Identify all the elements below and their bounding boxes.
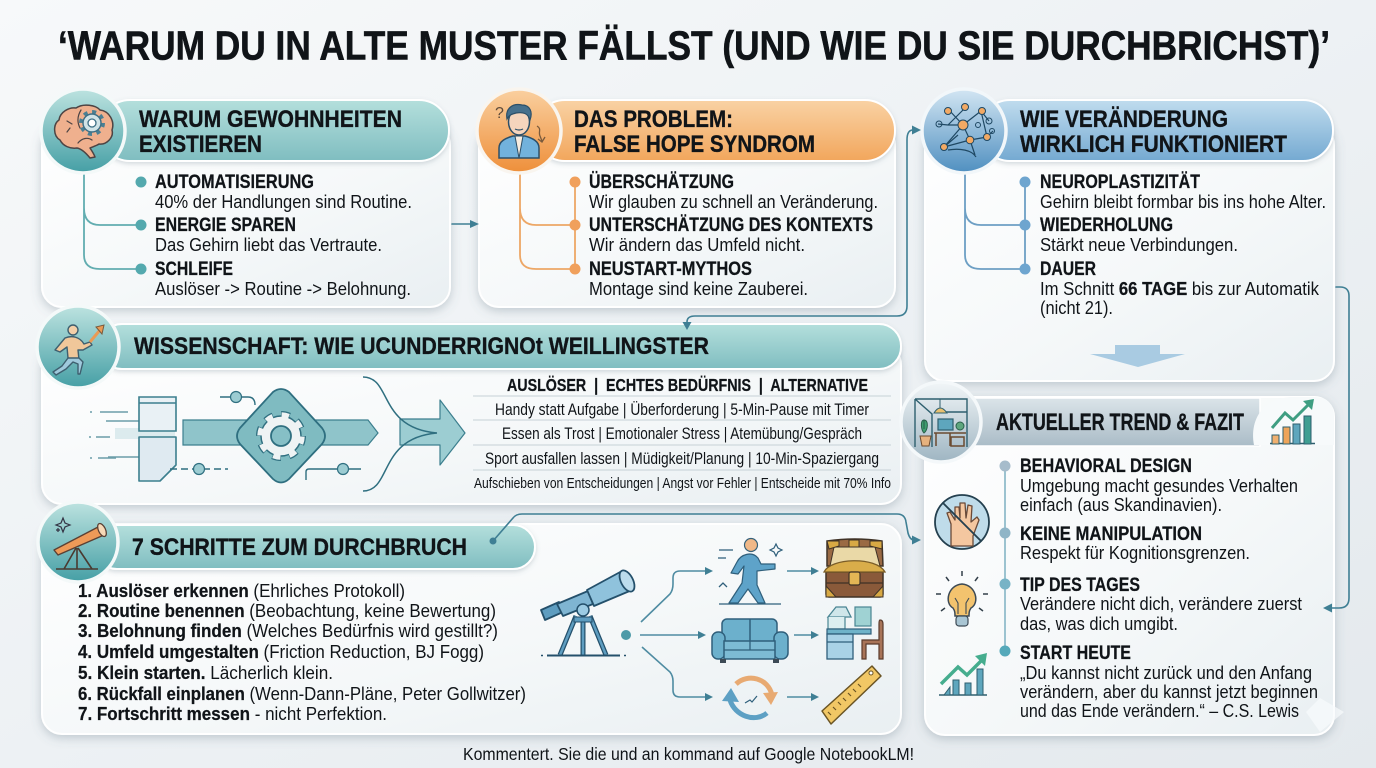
panel header xyxy=(980,100,1333,161)
bullet list xyxy=(1020,456,1318,721)
bullet dots xyxy=(136,176,146,274)
panel card xyxy=(925,125,1334,381)
icon: blue telescope xyxy=(541,568,638,656)
bullet list: und das Ende verändern.“ – C.S. Lewis xyxy=(1020,700,1299,721)
panel header: WISSENSCHAFT: WIE UCUNDERRIGNOt WEILLINGSTER xyxy=(134,333,709,360)
icon: light bulb xyxy=(936,571,988,626)
panel header: DAS PROBLEM: xyxy=(574,106,733,133)
panel card xyxy=(42,524,901,734)
panel card xyxy=(479,125,895,307)
bullet list: 40% der Handlungen sind Routine. xyxy=(155,191,412,212)
panel: aktueller trend und fazit xyxy=(901,382,1344,735)
bullet list xyxy=(155,172,412,299)
numbered steps: 4. Umfeld umgestalten (Friction Reduction, BJ Fogg) xyxy=(78,641,484,662)
bullet list xyxy=(1040,172,1326,318)
bullet list: verändern, aber du kannst jetzt beginnen xyxy=(1020,681,1318,702)
numbered steps: 2. Routine benennen (Beobachtung, keine Bewertung) xyxy=(78,600,496,621)
flow arrows xyxy=(621,567,819,701)
bullet dots xyxy=(570,176,580,274)
bullet list: Das Gehirn liebt das Vertraute. xyxy=(155,234,382,255)
panel header: EXISTIEREN xyxy=(139,131,262,158)
numbered steps xyxy=(78,580,526,724)
bullet list: SCHLEIFE xyxy=(155,259,233,280)
icon: brain with gear xyxy=(41,89,125,173)
arrow: steps to trend xyxy=(490,514,921,544)
bullet list: START HEUTE xyxy=(1020,643,1131,664)
bullet list: Respekt für Kognitionsgrenzen. xyxy=(1020,542,1250,563)
panel header: AKTUELLER TREND & FAZIT xyxy=(996,409,1244,436)
icon: growth chart xyxy=(939,653,987,695)
icon: ruler xyxy=(822,666,881,724)
icon: neural network brain xyxy=(922,89,1006,173)
panel header: WARUM GEWOHNHEITEN xyxy=(139,106,402,133)
panel card xyxy=(42,125,450,307)
panel header xyxy=(100,324,901,369)
table: Essen als Trost | Emotionaler Stress | Atemübung/Gespräch xyxy=(502,424,862,443)
bullet list: Montage sind keine Zauberei. xyxy=(589,278,808,299)
panel header xyxy=(535,100,895,161)
arrow: down to trend xyxy=(1090,345,1185,367)
icon: stop hand xyxy=(935,495,989,549)
icon: confused person xyxy=(477,89,561,173)
bullet list: (nicht 21). xyxy=(1040,297,1113,318)
output arrow xyxy=(400,400,465,465)
bullet list: NEUSTART-MYTHOS xyxy=(589,259,752,280)
icon: sofa xyxy=(712,619,788,663)
numbered steps: 3. Belohnung finden (Welches Bedürfnis wird gestillt?) xyxy=(78,620,498,641)
connector tree xyxy=(965,172,1025,269)
table: AUSLÖSER | ECHTES BEDÜRFNIS | ALTERNATIVE xyxy=(507,375,868,395)
bullet list: das, was dich umgibt. xyxy=(1020,613,1178,634)
panel: warum gewohnheiten existieren xyxy=(41,89,450,307)
panel header: FALSE HOPE SYNDROM xyxy=(574,131,815,158)
connector tree xyxy=(84,172,141,269)
icon: desk and chair xyxy=(827,607,883,659)
icon: orange telescope xyxy=(38,502,118,582)
arrow: change to trend xyxy=(1323,287,1349,612)
panel: 7 schritte xyxy=(38,502,901,734)
bullet list: Stärkt neue Verbindungen. xyxy=(1040,234,1238,255)
table: Sport ausfallen lassen | Müdigkeit/Planung | 10-Min-Spaziergang xyxy=(485,449,879,468)
footer note: Kommentert. Sie die und an kommand auf Google NotebookLM! xyxy=(463,744,914,764)
bullet list xyxy=(589,172,878,299)
bullet list: DAUER xyxy=(1040,259,1096,280)
timeline xyxy=(1000,460,1010,656)
icon: treasure chest xyxy=(824,539,885,597)
panel header: WIRKLICH FUNKTIONIERT xyxy=(1020,131,1287,158)
panel header xyxy=(950,398,1260,446)
numbered steps: 1. Auslöser erkennen (Ehrliches Protokoll) xyxy=(78,580,405,601)
panel card xyxy=(42,345,901,504)
central gear xyxy=(237,389,325,482)
bullet list: Gehirn bleibt formbar bis ins hohe Alter. xyxy=(1040,191,1326,212)
numbered steps: 6. Rückfall einplanen (Wenn-Dann-Pläne, Peter Gollwitzer) xyxy=(78,683,526,704)
icon: desk room xyxy=(901,382,981,462)
table: Aufschieben von Entscheidungen | Angst vor Fehler | Entscheide mit 70% Info xyxy=(474,475,891,492)
arrow: problem to change and science xyxy=(682,126,921,330)
sparkle xyxy=(1306,698,1344,732)
table xyxy=(473,375,891,492)
bullet list: Umgebung macht gesundes Verhalten xyxy=(1020,475,1298,496)
bullet list: ÜBERSCHÄTZUNG xyxy=(589,172,734,193)
bullet list: AUTOMATISIERUNG xyxy=(155,172,314,193)
bullet list: NEUROPLASTIZITÄT xyxy=(1040,172,1200,193)
bullet list: UNTERSCHÄTZUNG DES KONTEXTS xyxy=(589,215,873,236)
bullet list: „Du kannst nicht zurück und den Anfang xyxy=(1020,662,1312,683)
speed lines xyxy=(89,412,139,458)
icon: cycle arrows xyxy=(722,678,778,718)
numbered steps: 5. Klein starten. Lächerlich klein. xyxy=(78,662,333,683)
bullet list: WIEDERHOLUNG xyxy=(1040,215,1173,236)
bullet list: Auslöser -> Routine -> Belohnung. xyxy=(155,278,411,299)
bullet dots xyxy=(1020,176,1030,274)
panel header: 7 SCHRITTE ZUM DURCHBRUCH xyxy=(132,534,467,561)
connector tree xyxy=(520,172,575,269)
bullet list: Verändere nicht dich, verändere zuerst xyxy=(1020,593,1302,614)
small nodes xyxy=(220,397,255,405)
icon: walking person xyxy=(718,538,782,604)
icon: confused person: ? xyxy=(495,105,504,122)
bullet list: Wir ändern das Umfeld nicht. xyxy=(589,234,805,255)
bullet list: ENERGIE SPAREN xyxy=(155,215,296,236)
bullet list: Wir glauben zu schnell an Veränderung. xyxy=(589,191,878,212)
panel: wie veraenderung funktioniert xyxy=(922,89,1334,381)
icon: runner with arrow xyxy=(37,306,119,388)
bullet list: TIP DES TAGES xyxy=(1020,575,1140,596)
panel: wissenschaft xyxy=(37,306,901,504)
bullet list: Im Schnitt 66 TAGE bis zur Automatik xyxy=(1040,278,1320,299)
panel header xyxy=(100,100,449,161)
input boxes xyxy=(139,397,176,431)
bullet list: einfach (aus Skandinavien). xyxy=(1020,494,1222,515)
panel card xyxy=(925,397,1334,735)
icon: rising bar chart xyxy=(1253,397,1334,445)
bullet list: BEHAVIORAL DESIGN xyxy=(1020,456,1192,477)
numbered steps: 7. Fortschritt messen - nicht Perfektion. xyxy=(78,703,387,724)
diagram: process flow xyxy=(89,377,465,491)
panel: das problem xyxy=(477,89,895,307)
panel header: WIE VERÄNDERUNG xyxy=(1020,106,1228,133)
bullet list: KEINE MANIPULATION xyxy=(1020,524,1202,545)
panel header xyxy=(95,525,535,569)
table: Handy statt Aufgabe | Überforderung | 5-Min-Pause mit Timer xyxy=(495,400,869,419)
arrow: habits to problem xyxy=(452,220,479,228)
